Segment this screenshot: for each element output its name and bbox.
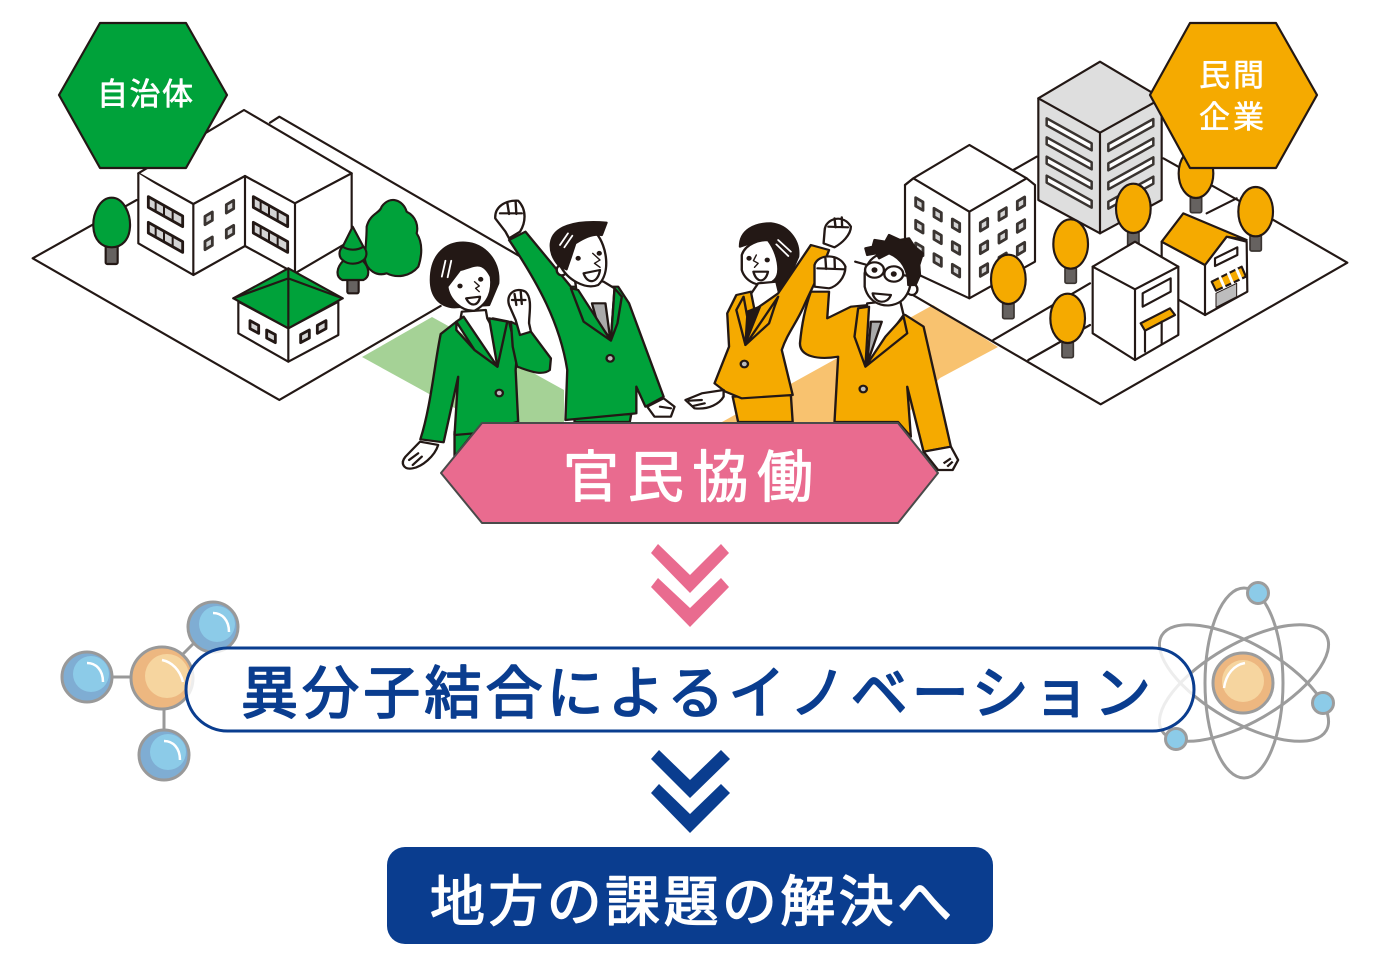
orange woman <box>685 217 851 422</box>
skirt <box>733 395 793 422</box>
hexagon label: private companies <box>1150 23 1317 168</box>
green man <box>495 201 675 422</box>
hair <box>865 235 923 285</box>
button <box>741 361 748 367</box>
banner: solving regional issues <box>387 847 993 944</box>
shop with awning <box>1162 213 1247 315</box>
ground outline <box>33 117 523 400</box>
hand <box>685 390 724 409</box>
orange walkway stripe <box>722 305 998 422</box>
button <box>607 355 614 362</box>
orange centre atom <box>131 647 193 709</box>
banner: public private collaboration <box>441 423 938 523</box>
ground outline and roads <box>910 157 1347 404</box>
fist <box>815 256 845 288</box>
grey office tower <box>1038 62 1162 233</box>
icon: atom <box>1142 582 1346 778</box>
lapel <box>736 297 778 345</box>
fist <box>495 201 525 238</box>
white small office <box>1093 242 1178 360</box>
blue atoms <box>62 602 238 780</box>
white apartment building <box>905 145 1035 298</box>
ear <box>557 265 567 275</box>
shirt <box>460 310 497 367</box>
face <box>742 240 778 285</box>
bush tree <box>365 200 421 276</box>
hand <box>647 398 675 417</box>
skirt <box>455 432 475 457</box>
face <box>447 265 491 311</box>
shirt <box>862 300 904 365</box>
shirt and neck <box>575 277 615 340</box>
tie <box>592 303 610 338</box>
fist <box>508 290 531 335</box>
government building <box>138 110 352 275</box>
pill: innovation through diversity <box>186 648 1194 731</box>
arrow: pink double chevron <box>651 544 729 627</box>
hair <box>740 223 798 290</box>
people <box>403 201 951 469</box>
scene: company district <box>905 62 1347 404</box>
button <box>496 390 503 396</box>
hexagon label: municipality: 自治体 <box>97 77 193 112</box>
ear <box>906 284 917 295</box>
face <box>560 233 606 286</box>
trousers <box>575 414 631 422</box>
hair <box>431 243 498 307</box>
hexagon label: municipality <box>59 23 227 168</box>
hexagon label: private companies: 民間 <box>1199 58 1264 93</box>
banner: public private collaboration: 官民協働 <box>563 446 813 509</box>
lapels <box>571 288 622 341</box>
icon: molecule <box>62 602 238 780</box>
arm <box>511 322 551 373</box>
pill: innovation through diversity: 異分子結合によるイノベーション <box>241 662 1151 726</box>
orange man <box>800 235 951 452</box>
icon: man's hand <box>924 447 958 470</box>
orange trees back <box>991 149 1273 319</box>
banner: solving regional issues: 地方の課題の解決へ <box>430 871 952 933</box>
hand <box>403 442 438 469</box>
fist <box>824 217 851 247</box>
round tree <box>93 198 130 264</box>
glasses <box>855 262 909 276</box>
jacket <box>420 318 518 442</box>
jacket <box>715 245 829 398</box>
scene: municipality district <box>33 110 523 400</box>
hexagon label: private companies: 企業 <box>1199 100 1264 135</box>
hair <box>551 222 607 269</box>
nucleus <box>1213 653 1273 713</box>
jacket <box>509 232 664 420</box>
arrow: navy double chevron <box>651 750 730 833</box>
green woman <box>403 243 551 469</box>
blouse <box>744 307 760 343</box>
orange tree front <box>1050 294 1085 358</box>
lapels <box>854 307 907 367</box>
jacket <box>800 292 951 452</box>
green walkway stripe <box>362 317 564 422</box>
pine tree <box>338 227 368 293</box>
electrons <box>1166 582 1334 750</box>
tie <box>867 322 882 363</box>
button <box>860 386 867 392</box>
face <box>865 253 911 305</box>
small annex house <box>233 268 343 362</box>
neck <box>749 282 780 312</box>
